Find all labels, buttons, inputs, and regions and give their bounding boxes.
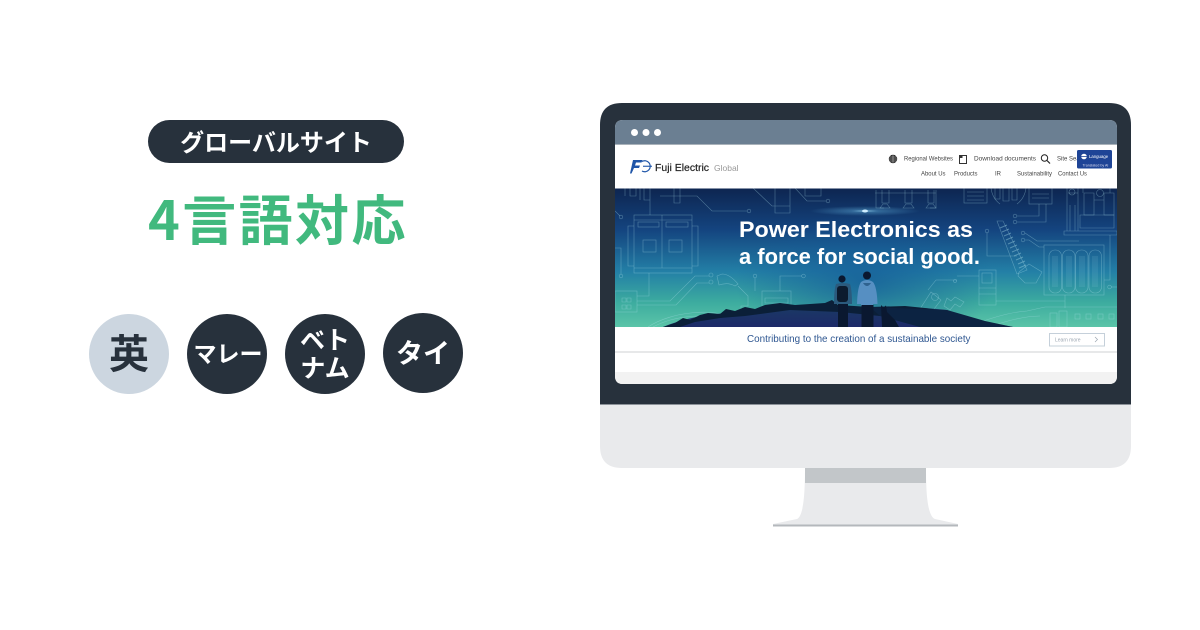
learn more button: Learn more — [1055, 338, 1081, 344]
language circle: Vietnamese: ナム — [300, 349, 350, 385]
language button: Translated by AI — [1082, 164, 1108, 168]
hero headline: a force for social good. — [739, 244, 980, 269]
hero banner — [615, 188, 1117, 327]
monitor stand — [773, 468, 958, 526]
language circle: Malay: マレー — [194, 334, 262, 368]
browser title bar — [615, 120, 1117, 145]
site navigation: Sustainability — [1017, 172, 1052, 178]
site navigation: IR — [995, 172, 1002, 178]
site logo: Fuji Electric — [655, 162, 709, 174]
language circle: English — [89, 314, 169, 394]
circuit line art — [615, 188, 1117, 327]
heading: 4言語対応: 4言語対応 — [148, 177, 408, 256]
monitor bezel — [600, 103, 1131, 404]
hero headline — [739, 217, 980, 269]
browser window — [615, 120, 1117, 384]
charger plug — [717, 274, 738, 286]
badge: グローバルサイト — [148, 120, 404, 163]
lower right curves and boxes — [984, 306, 1117, 321]
top middle connectors — [795, 188, 826, 201]
page footer strip — [615, 372, 1117, 384]
site navigation: Download documents — [974, 156, 1036, 162]
panel — [615, 291, 637, 312]
site navigation — [889, 155, 1088, 178]
cabinet — [634, 215, 692, 273]
hillside silhouette — [663, 308, 1013, 327]
insulator — [997, 221, 1027, 274]
language circle: Vietnamese — [285, 314, 365, 394]
tagline: Contributing to the creation of a sustainable society — [747, 333, 971, 345]
transformer — [1044, 245, 1104, 295]
platform equipment — [1064, 188, 1117, 235]
site navigation: Contact Us — [1058, 172, 1087, 178]
two children and cat silhouettes — [834, 272, 899, 327]
language circle: English: 英 — [109, 322, 149, 380]
badge: グローバルサイト: グローバルサイト — [180, 123, 372, 158]
language circle: Vietnamese: ベト — [300, 321, 350, 357]
language button: Language — [1089, 154, 1109, 159]
top right equipment — [964, 188, 987, 203]
language circle: Thai: タイ — [396, 332, 450, 370]
site navigation: Regional Websites — [904, 156, 953, 162]
monitor chin — [600, 404, 1131, 468]
robot arm and wrench — [932, 294, 938, 300]
top middle ceiling equipment — [875, 190, 936, 208]
language circle: Thai — [383, 313, 463, 393]
inverter — [979, 270, 996, 305]
site logo: Global — [714, 163, 739, 173]
language button — [1077, 150, 1112, 168]
monitor illustration — [600, 103, 1131, 526]
site logo — [630, 160, 739, 174]
learn more button — [1050, 334, 1104, 346]
hero headline: Power Electronics as — [739, 217, 973, 242]
language circle: Malay — [187, 314, 267, 394]
site navigation: Site Search — [1057, 156, 1088, 162]
site navigation: Products — [954, 172, 978, 178]
site navigation: About Us — [921, 172, 946, 178]
top-left connectors — [625, 188, 680, 215]
